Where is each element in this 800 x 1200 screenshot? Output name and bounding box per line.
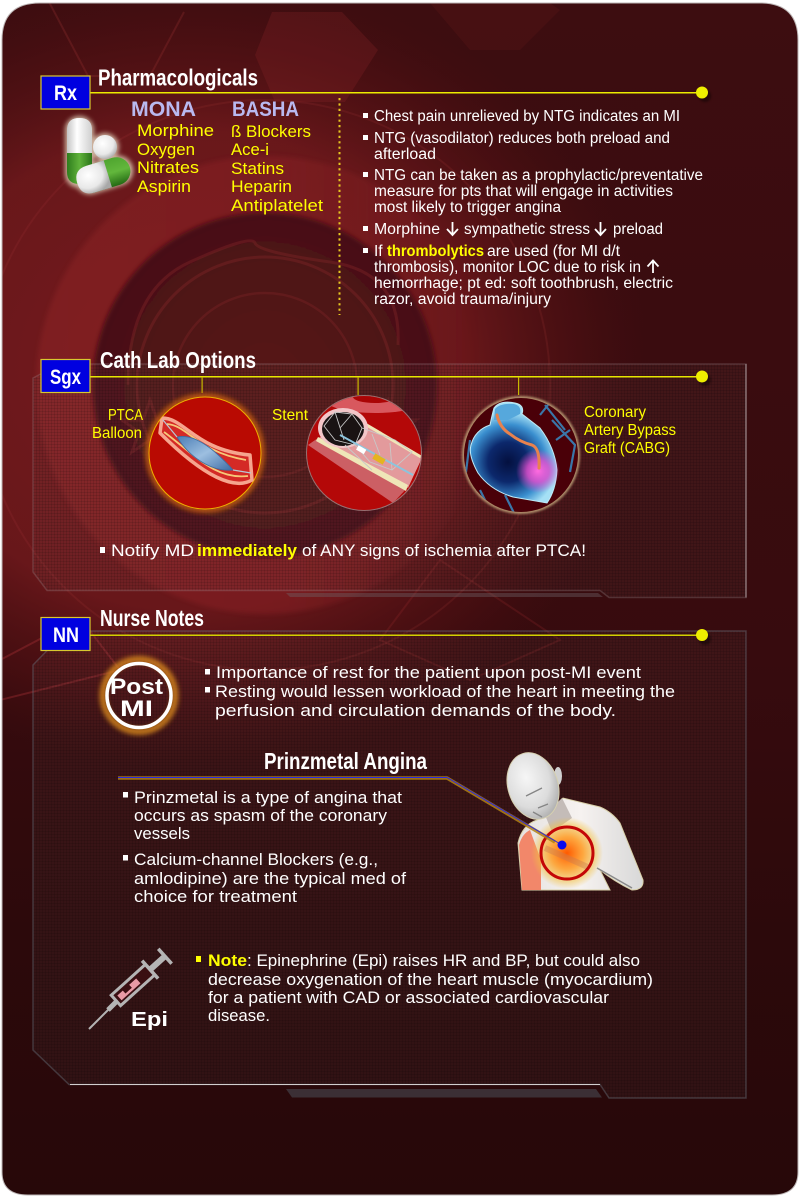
- image: stent in artery: [306, 389, 423, 511]
- image: man clutching chest: [499, 746, 643, 890]
- text block: Prinzmetal bullets: amlodipine) are the typical med of: [134, 869, 406, 888]
- text block: pharmacological bullets: NTG can be taken as a prophylactic/preventative: [374, 167, 703, 184]
- section header: Nurse Notes: [41, 605, 711, 650]
- BASHA list: Statins: [231, 159, 284, 178]
- PTCA Balloon label: PTCA: [108, 407, 143, 424]
- callout: epinephrine note: Note: [208, 951, 247, 970]
- text block: Prinzmetal bullets: vessels: [134, 824, 190, 843]
- callout: epinephrine note: decrease oxygenation of the heart muscle (myocardium): [208, 970, 653, 989]
- callout: notify MD: Notify MD: [111, 541, 194, 560]
- text block: post-MI rest: Importance of rest for the patient upon post-MI event: [216, 663, 641, 682]
- panel: Nurse Notes frame: [33, 631, 746, 1098]
- CABG label: Artery Bypass: [584, 422, 676, 439]
- text block: pharmacological bullets: NTG (vasodilator) reduces both preload and: [374, 130, 670, 147]
- BASHA list: Antiplatelet: [231, 196, 323, 215]
- text block: pharmacological bullets: are used (for MI d/t: [487, 243, 621, 260]
- heading: Prinzmetal Angina: Prinzmetal Angina: [264, 748, 427, 774]
- MONA list: Nitrates: [137, 158, 199, 177]
- section header: Cath Lab Options: Sgx: [50, 366, 81, 389]
- BASHA list: ß Blockers: [231, 122, 311, 141]
- text block: pharmacological bullets: afterload: [374, 146, 436, 163]
- text block: Prinzmetal bullets: Calcium-channel Blockers (e.g.,: [134, 850, 378, 869]
- section header: Cath Lab Options: Cath Lab Options: [100, 347, 256, 373]
- text block: pharmacological bullets: Morphine: [374, 221, 440, 238]
- MONA list: Oxygen: [137, 140, 195, 159]
- BASHA list: [231, 98, 323, 215]
- callout: epinephrine note: [196, 951, 653, 1025]
- text block: pharmacological bullets: razor, avoid trauma/injury: [374, 291, 551, 308]
- callout: notify MD: of ANY signs of ischemia after PTCA!: [302, 541, 586, 560]
- BASHA list: BASHA: [232, 98, 299, 121]
- text block: pharmacological bullets: thrombolytics: [387, 243, 484, 260]
- icon: syringe with Epi label: Epi: [131, 1009, 168, 1031]
- section header: Nurse Notes: Nurse Notes: [100, 605, 204, 631]
- text block: Prinzmetal bullets: choice for treatment: [134, 887, 297, 906]
- callout: epinephrine note: disease.: [208, 1006, 270, 1025]
- section header: Nurse Notes: NN: [53, 624, 79, 647]
- MONA list: Morphine: [137, 121, 214, 140]
- icon: Post MI badge: MI: [120, 696, 153, 721]
- text block: pharmacological bullets: Chest pain unrelieved by NTG indicates an MI: [374, 108, 680, 125]
- panel: Cath Lab frame: [33, 364, 746, 598]
- icon: syringe with Epi label: [89, 947, 173, 1031]
- CABG label: Coronary: [584, 404, 646, 421]
- CABG label: Graft (CABG): [584, 440, 670, 457]
- callout: notify MD: immediately: [197, 541, 298, 560]
- dotted divider: [338, 98, 340, 315]
- text block: pharmacological bullets: measure for pts that will engage in activities: [374, 183, 673, 200]
- text block: pharmacological bullets: thrombosis), monitor LOC due to risk in: [374, 259, 641, 276]
- text block: post-MI rest: perfusion and circulation demands of the body.: [215, 701, 616, 720]
- text block: pharmacological bullets: hemorrhage; pt ed: soft toothbrush, electric: [374, 275, 673, 292]
- MONA list: MONA: [131, 98, 196, 121]
- callout: epinephrine note: for a patient with CAD or associated cardiovascular: [208, 988, 609, 1007]
- MONA list: [131, 98, 214, 196]
- PTCA Balloon label: [92, 407, 143, 442]
- MONA list: Aspirin: [137, 177, 191, 196]
- icon: Post MI badge: [103, 660, 175, 732]
- text block: post-MI rest: [205, 663, 675, 720]
- section header: Pharmacologicals: Rx: [54, 82, 77, 105]
- text block: pharmacological bullets: preload: [613, 221, 663, 238]
- text block: pharmacological bullets: most likely to trigger angina: [374, 199, 561, 216]
- icon: Post MI badge: Post: [110, 674, 164, 699]
- image: PTCA balloon in artery: [145, 393, 265, 513]
- text block: pharmacological bullets: If: [374, 243, 383, 260]
- text block: post-MI rest: Resting would lessen workload of the heart in meeting the: [215, 682, 675, 701]
- Stent label: Stent: [272, 407, 309, 424]
- text block: pharmacological bullets: [363, 108, 703, 308]
- pointer line to chest: [118, 778, 566, 850]
- text block: Prinzmetal bullets: [123, 788, 406, 906]
- BASHA list: Heparin: [231, 177, 292, 196]
- text block: Prinzmetal bullets: Prinzmetal is a type of angina that: [134, 788, 402, 807]
- PTCA Balloon label: Balloon: [92, 425, 142, 442]
- CABG label: [584, 404, 676, 457]
- text block: pharmacological bullets: sympathetic stress: [464, 221, 590, 238]
- image: heart with bypass graft: [462, 396, 580, 515]
- text block: Prinzmetal bullets: occurs as spasm of the coronary: [134, 806, 388, 825]
- icon: pills: [65, 116, 137, 198]
- BASHA list: Ace-i: [231, 140, 269, 159]
- section header: Pharmacologicals: [41, 64, 711, 109]
- callout: epinephrine note: : Epinephrine (Epi) raises HR and BP, but could also: [247, 951, 640, 970]
- section header: Cath Lab Options: [41, 347, 711, 395]
- callout: notify MD: [100, 541, 586, 560]
- section header: Pharmacologicals: Pharmacologicals: [98, 64, 258, 90]
